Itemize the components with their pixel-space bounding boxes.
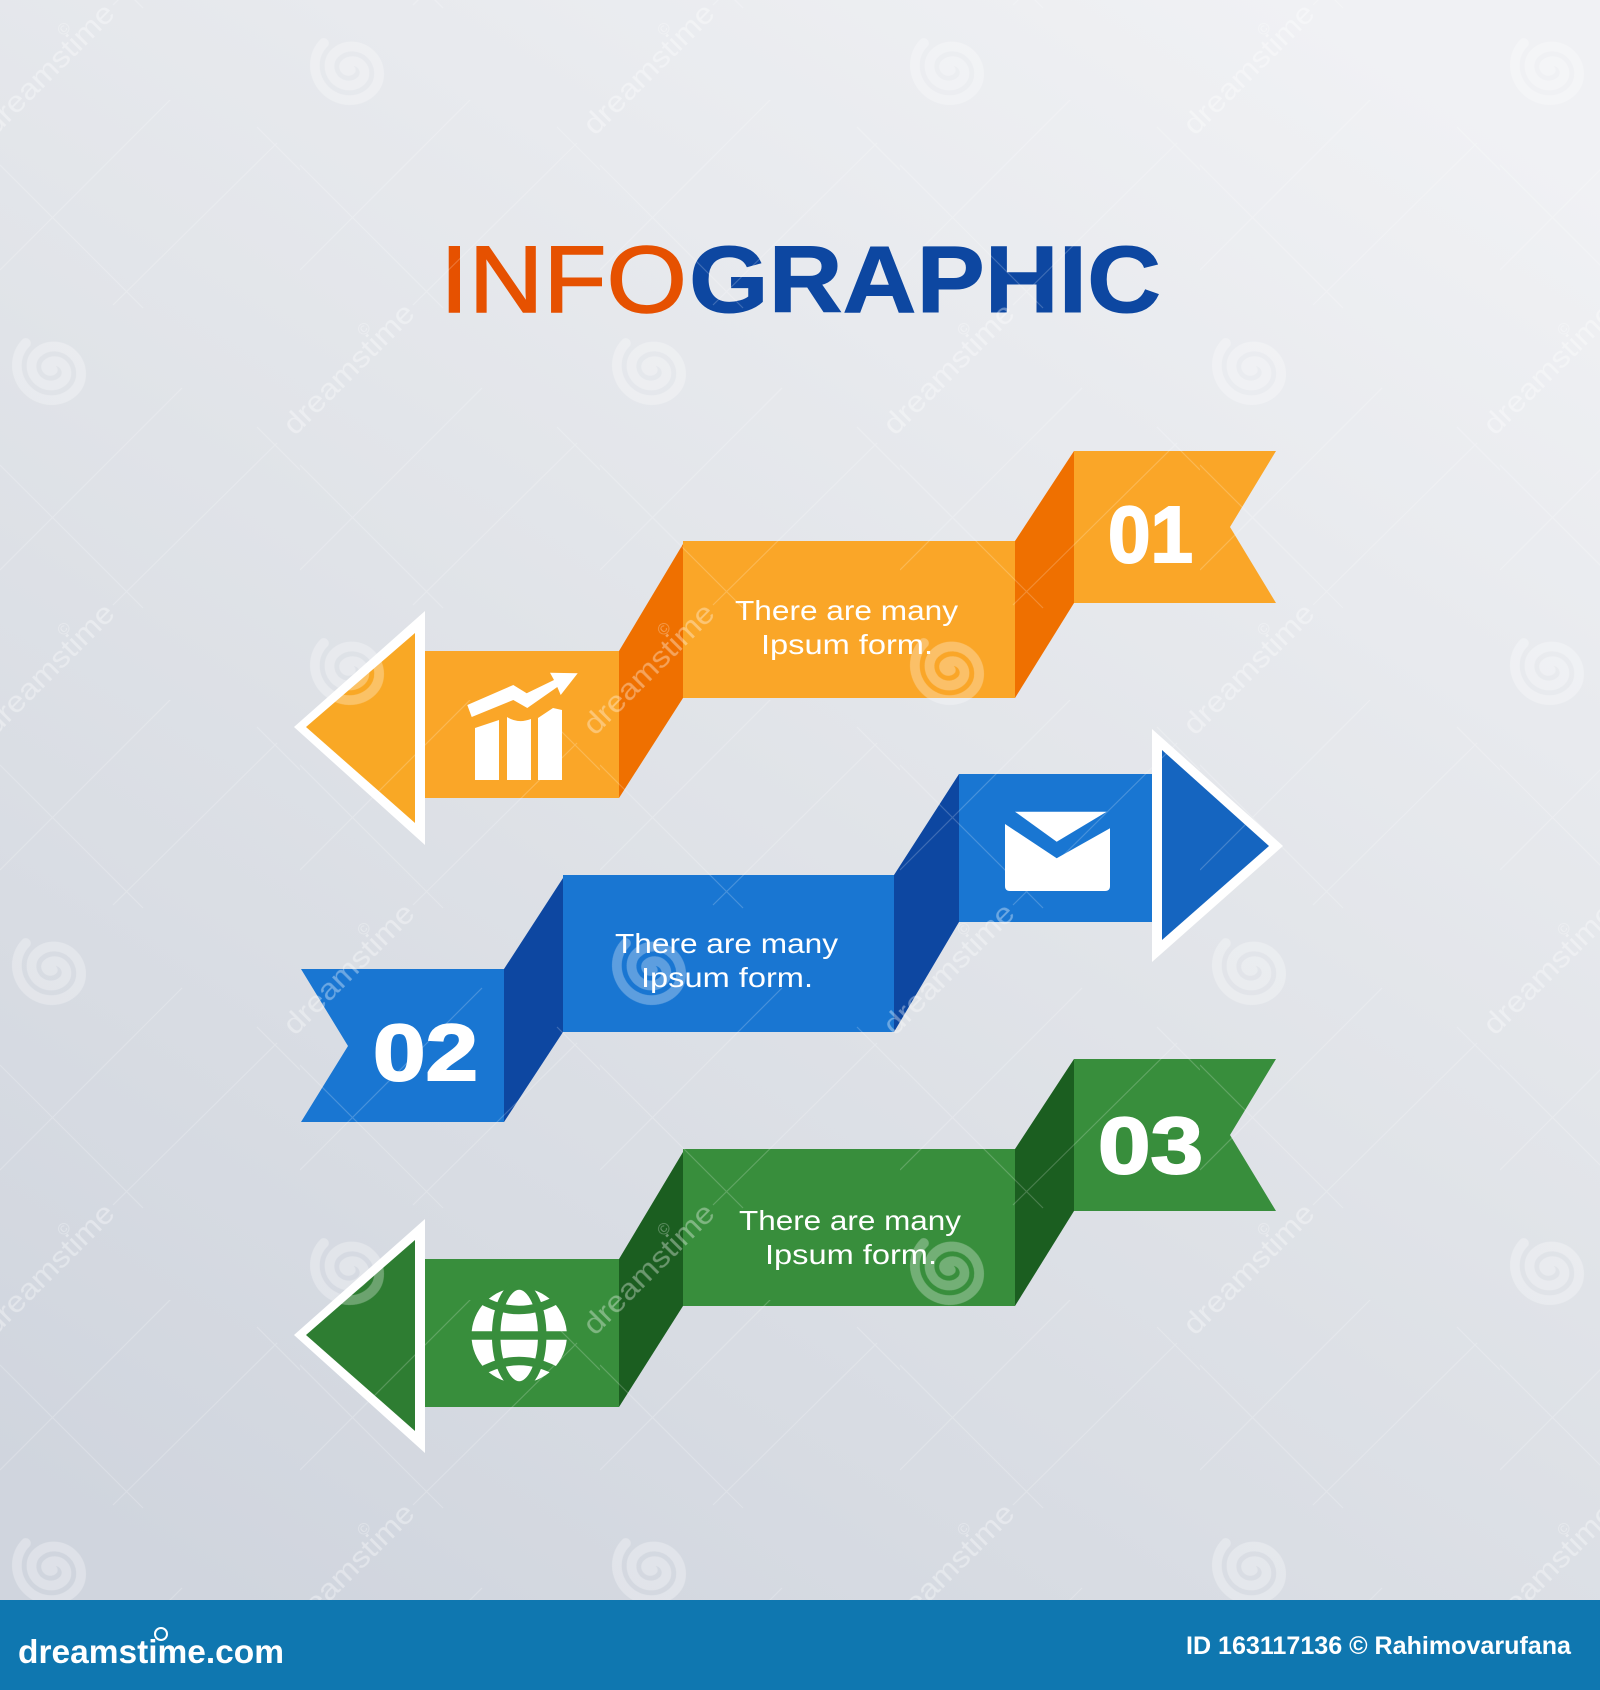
text block (563, 875, 894, 1032)
watermark overlay: © (354, 319, 375, 340)
title: INFO (440, 227, 687, 333)
text block: Ipsum form. (765, 1239, 937, 1270)
ribbon flag with number: 03 (1098, 1101, 1203, 1190)
watermark overlay: dreamstime (876, 896, 1021, 1041)
watermark overlay: dreamstime (576, 0, 721, 141)
fold: lower (504, 878, 563, 1122)
ribbon flag with number: 02 (373, 1008, 478, 1097)
fold: lower (619, 544, 683, 798)
arrow: right (1152, 729, 1283, 962)
text block: Ipsum form. (761, 629, 933, 660)
watermark overlay: © (954, 919, 975, 940)
watermark overlay: dreamstime (276, 296, 421, 441)
ribbon flag with number (1074, 1059, 1276, 1211)
watermark overlay: dreamstime (1176, 0, 1321, 141)
text block: Ipsum form. (641, 962, 813, 993)
watermark overlay: dreamstime (576, 1196, 721, 1341)
watermark overlay: © (1554, 319, 1575, 340)
watermark overlay: dreamstime (276, 1496, 421, 1641)
ribbon flag with number (301, 969, 504, 1122)
watermark overlay: dreamstime (1176, 596, 1321, 741)
watermark overlay: © (54, 619, 75, 640)
watermark overlay: dreamstime (576, 596, 721, 741)
text block (683, 1149, 1015, 1306)
icon block: growth chart (425, 651, 619, 798)
panel: orange ribbon 01 (294, 451, 1276, 845)
text block (683, 541, 1015, 698)
fold: lower (619, 1152, 683, 1407)
text block: There are many (739, 1205, 961, 1236)
ribbon flag with number (1074, 451, 1276, 603)
title: GRAPHIC (689, 227, 1161, 333)
watermark overlay: © (1254, 619, 1275, 640)
ribbon flag with number: 01 (1108, 490, 1193, 579)
watermark overlay: © (54, 19, 75, 40)
arrow: left (294, 1219, 425, 1453)
watermark overlay: © (654, 1219, 675, 1240)
fold: upper (1015, 1059, 1074, 1306)
watermark overlay: © (354, 919, 375, 940)
watermark overlay: © (1254, 19, 1275, 40)
icon block: envelope (959, 774, 1152, 922)
watermark overlay: © (654, 619, 675, 640)
watermark overlay: © (1254, 1219, 1275, 1240)
watermark overlay: © (954, 319, 975, 340)
footer bar (0, 1600, 1600, 1690)
panel: green ribbon 03 (294, 1059, 1276, 1453)
arrow: left (294, 611, 425, 845)
watermark overlay: © (1554, 919, 1575, 940)
title (440, 227, 1161, 333)
watermark overlay: dreamstime (276, 896, 421, 1041)
watermark overlay: dreamstime (1176, 1196, 1321, 1341)
watermark overlay: © (354, 1519, 375, 1540)
watermark overlay: © (954, 1519, 975, 1540)
icon block: globe (425, 1259, 619, 1407)
footer credit: ID 163117136 © Rahimovarufana (1186, 1632, 1572, 1660)
watermark overlay: dreamstime (876, 296, 1021, 441)
footer logo: dreamstime.com (18, 1633, 284, 1670)
text block: There are many (615, 928, 838, 959)
watermark overlay: dreamstime (876, 1496, 1021, 1641)
fold: upper (894, 774, 959, 1032)
watermark overlay: © (1554, 1519, 1575, 1540)
text block: There are many (735, 595, 958, 626)
panel: blue ribbon 02 (301, 729, 1283, 1122)
watermark overlay: © (54, 1219, 75, 1240)
fold: upper (1015, 451, 1074, 698)
watermark overlay: © (654, 19, 675, 40)
